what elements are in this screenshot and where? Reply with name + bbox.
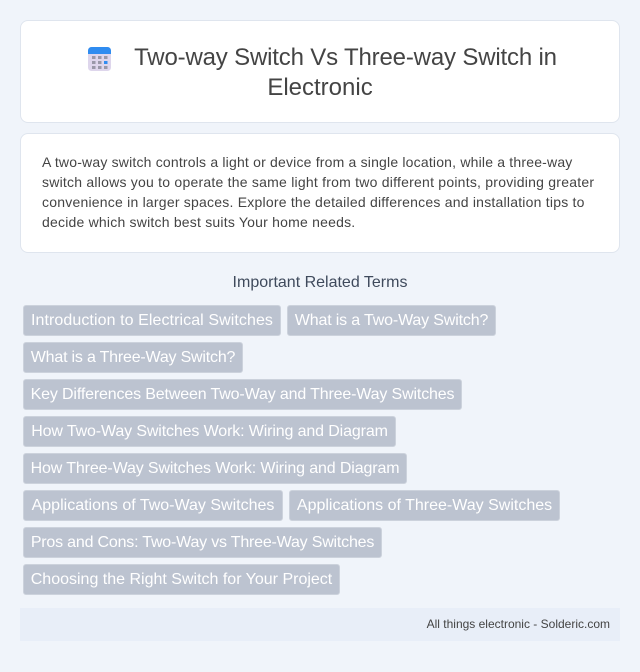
icon: calendar [88, 47, 111, 71]
footer: All things electronic - Solderic.com [427, 617, 610, 631]
tag: applications three-way [289, 490, 560, 521]
panel: summary card [20, 133, 620, 253]
tag: how two-way works [23, 416, 396, 447]
tag: pros and cons: Pros and Cons: Two-Way vs Three-Way Switches [31, 534, 374, 551]
tag: two-way [287, 305, 496, 336]
text block: summary: decide which switch best suits Your home needs. [42, 214, 355, 230]
tag: applications two-way: Applications of Two-Way Switches [32, 497, 274, 514]
tag: introduction: Introduction to Electrical Switches [31, 312, 273, 329]
tag: applications two-way [23, 490, 283, 521]
tag: how three-way works [23, 453, 407, 484]
tag: three-way: What is a Three-Way Switch? [31, 349, 235, 366]
tag: choosing: Choosing the Right Switch for Your Project [31, 571, 332, 588]
tag: choosing [23, 564, 340, 595]
panel: title card [20, 20, 620, 123]
text block: summary: A two-way switch controls a light or device from a single location, while a three-way [42, 154, 572, 170]
panel: related term tags [23, 305, 560, 595]
tag: how three-way works: How Three-Way Switches Work: Wiring and Diagram [31, 460, 399, 477]
text block: summary [42, 154, 594, 230]
text block: summary: switch allows you to operate the same light from two different points, providing greater [42, 174, 594, 190]
tag: applications three-way: Applications of Three-Way Switches [297, 497, 552, 514]
title [134, 44, 557, 101]
heading: related terms: Important Related Terms [233, 274, 407, 291]
title: Two-way Switch Vs Three-way Switch in [134, 44, 557, 71]
footer [20, 608, 620, 641]
tag: key differences [23, 379, 462, 410]
tag: pros and cons [23, 527, 382, 558]
tag: how two-way works: How Two-Way Switches Work: Wiring and Diagram [31, 423, 388, 440]
tag: two-way: What is a Two-Way Switch? [295, 312, 488, 329]
tag: three-way [23, 342, 243, 373]
text block: summary: convenience in larger spaces. Explore the detailed differences and installation tips to [42, 194, 585, 210]
tag: key differences: Key Differences Between Two-Way and Three-Way Switches [31, 386, 454, 403]
tag: introduction [23, 305, 281, 336]
title: Electronic [267, 74, 373, 101]
